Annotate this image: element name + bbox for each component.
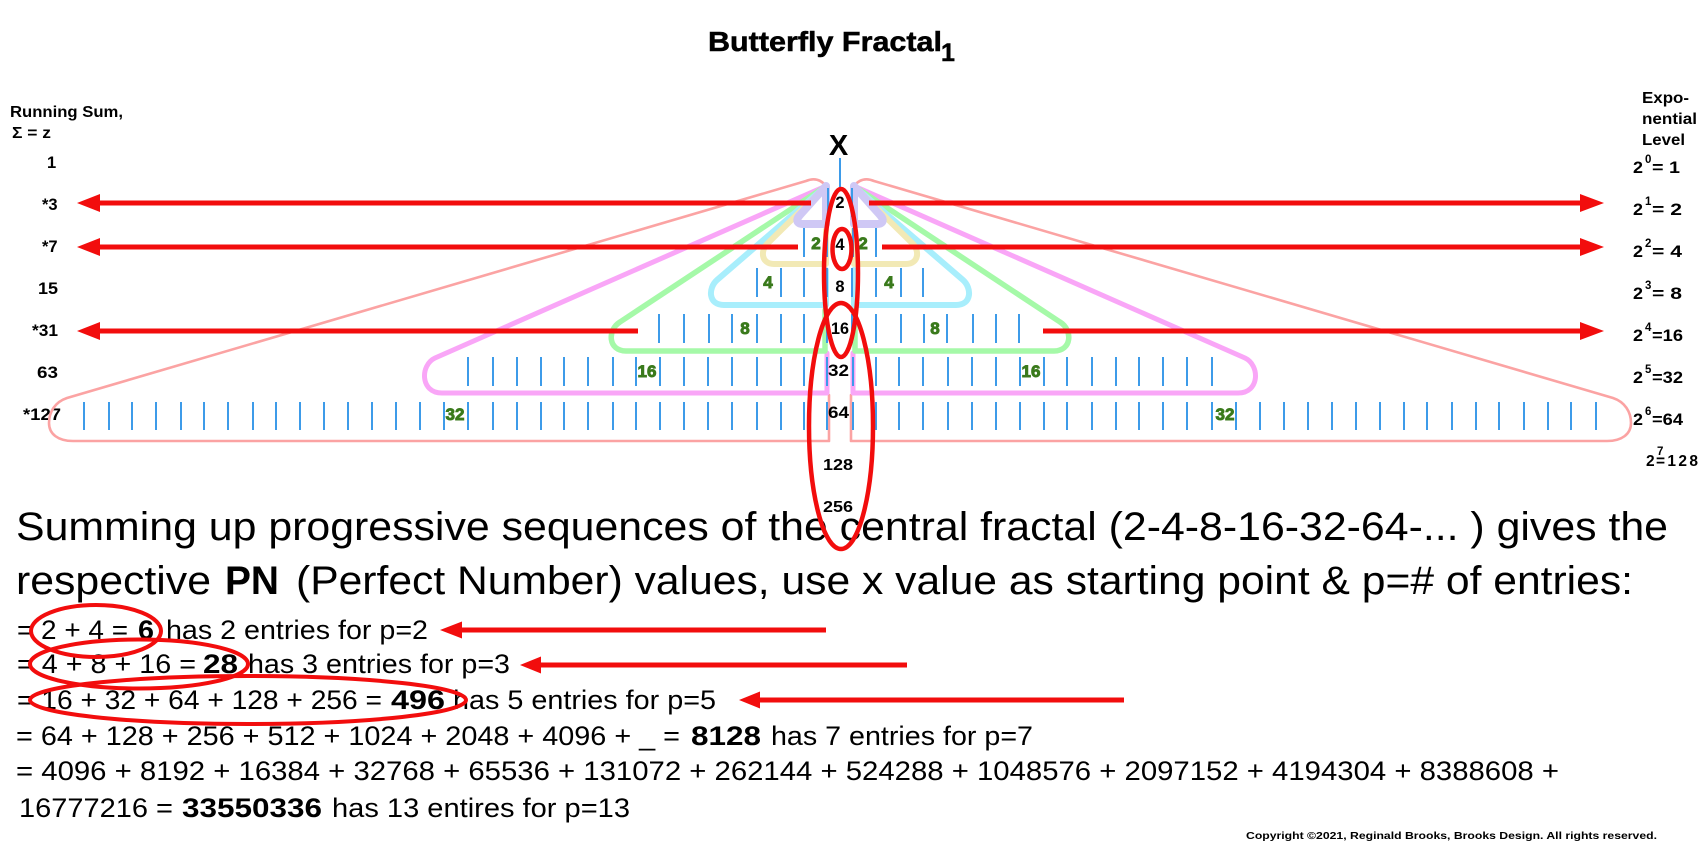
sum: p=7: has 7 entries for p=7 — [771, 721, 1033, 751]
sum: p=7: = 64 + 128 + 256 + 512 + 1024 + 2048 + 4096 + _ = — [16, 721, 680, 751]
running sum values: *31 — [32, 322, 58, 340]
exponent values: = 1 — [1652, 159, 1680, 177]
wing: pink outline level 32 — [425, 186, 1255, 393]
sum: p=7: 8128 — [691, 721, 761, 751]
exponent values: =32 — [1652, 369, 1683, 387]
arrow: level 4 left — [77, 322, 638, 340]
sum: p=5 — [17, 685, 716, 715]
running sum values — [23, 154, 61, 424]
running sum values: 1 — [47, 154, 56, 172]
exponent values: 3 — [1645, 280, 1651, 292]
exponential level heading: Expo- — [1642, 90, 1689, 107]
exponent values: 2 — [1633, 285, 1643, 303]
exponent values: 1 — [1645, 196, 1652, 208]
explanatory heading text: (Perfect Number) values, use x value as starting point & p=# of entries: — [296, 559, 1633, 603]
exponent values — [1633, 154, 1698, 470]
green wing counts: 4 — [763, 273, 773, 292]
sum: p=2 — [17, 615, 428, 645]
lower red arrows — [440, 622, 1124, 708]
green wing counts: 32 — [1216, 405, 1234, 424]
central fractal numbers: 2 — [835, 194, 845, 212]
exponent values: = 8 — [1652, 285, 1682, 303]
exponent values: 2 — [1633, 369, 1643, 387]
central fractal numbers — [823, 130, 853, 516]
title: 1 — [941, 39, 955, 67]
exponent values: 0 — [1645, 154, 1651, 166]
sum: p=5: has 5 entries for p=5 — [453, 685, 716, 715]
running sum values: *7 — [42, 238, 58, 256]
exponent values: = 2 — [1652, 201, 1682, 219]
exponent values: 2 — [1633, 201, 1643, 219]
exponent values: 2 — [1633, 327, 1643, 345]
green wing counts: 32 — [446, 405, 464, 424]
blue tick marks — [84, 158, 1596, 430]
sum: p=3 — [17, 649, 510, 679]
title: Butterfly Fractal — [708, 26, 942, 57]
column: running sum — [10, 104, 123, 424]
exponent values: = 4 — [1652, 243, 1683, 261]
central fractal numbers: 32 — [828, 362, 849, 380]
exponential level heading: nential — [1642, 111, 1697, 128]
title — [708, 26, 955, 67]
arrow: level 1 left — [77, 194, 811, 212]
exponent values: 4 — [1645, 322, 1652, 334]
running sum values: 63 — [37, 364, 58, 382]
central fractal numbers: 8 — [835, 278, 845, 296]
column: exponential level — [1633, 90, 1698, 470]
butterfly fractal diagram — [49, 158, 1631, 441]
exponent values: 2 — [1646, 453, 1655, 470]
ellipse: 4 — [832, 229, 852, 269]
arrow: level 1 right — [869, 194, 1604, 212]
green wing counts — [446, 234, 1234, 424]
red ellipses highlighting sequences — [30, 189, 873, 724]
wing: lavender outline level 2 — [797, 186, 883, 224]
green wing counts: 2 — [858, 234, 868, 253]
exponential level heading — [1642, 90, 1697, 149]
sum: p=2: 6 — [138, 615, 154, 645]
green wing counts: 2 — [811, 234, 821, 253]
sum: p=2: has 2 entries for p=2 — [166, 615, 428, 645]
sum: p=5: 496 — [391, 685, 445, 715]
exponential level heading: Level — [1642, 132, 1685, 149]
sum: p=13: 16777216 = — [19, 793, 173, 823]
ellipse: 4+8+16=28 — [30, 640, 248, 688]
green wing counts: 8 — [930, 319, 940, 338]
wing: salmon outline level 64 — [49, 179, 1631, 441]
arrow: level 2 right — [882, 238, 1604, 256]
wing: yellow outline level 4 — [763, 186, 917, 264]
exponent values: 7 — [1657, 446, 1663, 458]
arrow: p=3 — [520, 656, 907, 674]
central fractal numbers: X — [829, 130, 849, 162]
sum: p=2: = 2 + 4 = — [17, 615, 128, 645]
ellipse: 2+4=6 — [31, 605, 161, 657]
explanatory heading text: PN — [225, 559, 279, 603]
ellipse: 16 to 256 — [809, 303, 873, 549]
running sum heading — [10, 104, 123, 142]
green wing counts: 16 — [638, 362, 656, 381]
sum: p=13 — [16, 756, 1559, 823]
arrow: p=5 — [739, 692, 1124, 708]
exponent values: =64 — [1652, 411, 1684, 429]
green wing counts: 8 — [740, 319, 750, 338]
sum: p=3: has 3 entries for p=3 — [248, 649, 510, 679]
explanatory heading text: Summing up progressive sequences of the central fractal (2-4-8-16-32-64-... ) gives the — [16, 505, 1668, 549]
explanatory heading text — [16, 505, 1668, 603]
upper red arrows — [77, 194, 1604, 340]
running sum values: 15 — [38, 280, 58, 298]
exponent values: 6 — [1645, 406, 1651, 418]
sum: p=7 — [16, 721, 1033, 751]
central fractal numbers: 4 — [835, 236, 845, 254]
running sum heading: Σ = z — [12, 125, 51, 142]
sum: p=13: 33550336 — [182, 793, 322, 823]
exponent values: 2 — [1633, 159, 1643, 177]
exponent values: 2 — [1633, 243, 1643, 261]
ellipse: 2 to 16 — [824, 189, 858, 357]
exponent values: 5 — [1645, 364, 1652, 376]
ellipse: 16..256=496 — [30, 676, 466, 724]
central fractal numbers: 64 — [828, 404, 850, 422]
copyright: Copyright ©2021, Reginald Brooks, Brooks Design. All rights reserved. — [1246, 830, 1657, 842]
arrow: level 4 right — [1043, 322, 1604, 340]
perfect number sums — [16, 615, 1559, 823]
running sum heading: Running Sum, — [10, 104, 123, 121]
central fractal numbers: 256 — [823, 499, 853, 516]
exponent values: =16 — [1652, 327, 1683, 345]
sum: p=5: = 16 + 32 + 64 + 128 + 256 = — [17, 685, 382, 715]
explanatory heading text: respective — [16, 559, 211, 603]
sum: p=3: 28 — [203, 649, 238, 679]
arrow: p=2 — [440, 622, 826, 638]
central fractal numbers: 16 — [831, 320, 849, 338]
green wing counts: 16 — [1022, 362, 1040, 381]
wing: green outline level 16 — [611, 186, 1069, 351]
sum: p=13: = 4096 + 8192 + 16384 + 32768 + 65536 + 131072 + 262144 + 524288 + 1048576 + 2097152 + 4194304 + 8388608 + — [16, 756, 1559, 786]
wing: cyan outline level 8 — [711, 186, 969, 305]
green wing counts: 4 — [884, 273, 894, 292]
exponent values: 2 — [1633, 411, 1643, 429]
exponent values: 2 — [1645, 238, 1651, 250]
running sum values: *3 — [42, 196, 58, 214]
sum: p=3: = 4 + 8 + 16 = — [17, 649, 196, 679]
central fractal numbers: 128 — [823, 457, 853, 474]
sum: p=13: has 13 entires for p=13 — [332, 793, 630, 823]
arrow: level 2 left — [77, 238, 798, 256]
exponent values: =128 — [1656, 453, 1698, 470]
running sum values: *127 — [23, 406, 61, 424]
